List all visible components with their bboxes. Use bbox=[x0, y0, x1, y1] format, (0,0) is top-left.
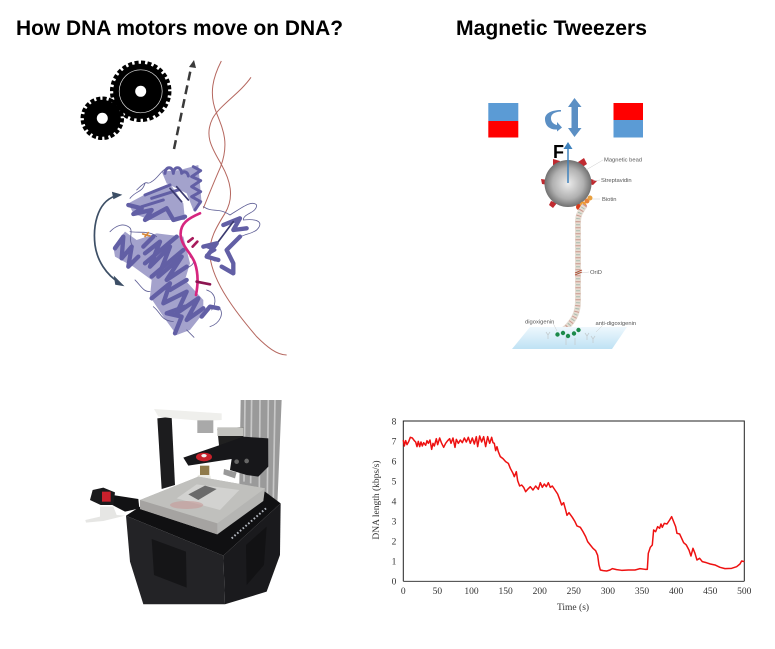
protein thin loops bbox=[110, 167, 260, 337]
white top arm bbox=[154, 409, 222, 421]
black magnet arm bbox=[183, 437, 268, 478]
black body top bbox=[126, 492, 281, 556]
x axis ticks: 200 bbox=[533, 587, 547, 597]
icon: large gear bbox=[112, 63, 169, 120]
x axis ticks: 50 bbox=[433, 587, 442, 597]
ATP site bbox=[143, 233, 150, 237]
protein dark sheet strands bbox=[170, 187, 233, 242]
streptavidin markers bbox=[541, 158, 597, 208]
digoxigenin markers bbox=[555, 328, 581, 338]
y axis ticks: 2 bbox=[392, 538, 397, 548]
arrow: dashed direction of motion bbox=[174, 60, 196, 149]
panel: DNA length vs time chart bbox=[371, 418, 752, 613]
y axis ticks: 1 bbox=[392, 558, 397, 568]
arrow: force bbox=[564, 142, 572, 183]
title: How DNA motors move on DNA?: How DNA motors move on DNA? bbox=[16, 17, 343, 40]
DNA strands bbox=[203, 61, 287, 355]
schematic labels: Biotin bbox=[602, 197, 617, 203]
left magnet bbox=[488, 103, 518, 138]
y axis ticks: 8 bbox=[392, 418, 397, 428]
panel: DNA motor illustration bbox=[83, 60, 287, 355]
protein main ribbons bbox=[115, 205, 247, 333]
icon: small gear bbox=[83, 99, 122, 138]
y axis ticks: 7 bbox=[392, 438, 397, 448]
arrow: vertical magnet translation bbox=[568, 98, 582, 137]
black body front bbox=[126, 516, 225, 604]
schematic labels: digoxigenin bbox=[525, 320, 554, 326]
schematic labels bbox=[525, 158, 642, 332]
protein body mass bbox=[113, 165, 203, 335]
camera tube bbox=[197, 420, 213, 433]
right magnet bbox=[614, 103, 643, 138]
magnetic bead bbox=[544, 160, 592, 207]
y axis ticks: 5 bbox=[392, 478, 397, 488]
x axis ticks: 150 bbox=[498, 587, 513, 597]
anti-digoxigenin antibodies bbox=[546, 332, 595, 345]
arrow: magnet rotation bbox=[545, 110, 562, 132]
schematic labels: anti-digoxigenin bbox=[596, 321, 636, 327]
black support post bbox=[157, 417, 175, 489]
data trace bbox=[403, 436, 744, 571]
schematic labels: Streptavidin bbox=[601, 178, 632, 184]
y axis ticks: 4 bbox=[392, 498, 397, 508]
y axis title: DNA length (kbps/s) bbox=[371, 460, 382, 540]
access panels bbox=[152, 539, 187, 588]
force label F: F bbox=[553, 142, 564, 162]
x axis ticks: 100 bbox=[464, 587, 479, 597]
y axis ticks: 3 bbox=[392, 518, 397, 528]
x axis ticks: 250 bbox=[567, 587, 581, 597]
y axis ticks: 6 bbox=[392, 458, 397, 468]
glass slide bbox=[512, 327, 627, 349]
panel: magnetic tweezers instrument photo bbox=[85, 400, 282, 604]
schematic labels: OriD bbox=[590, 270, 602, 276]
motor bbox=[217, 427, 243, 448]
objective holder bbox=[197, 466, 211, 484]
x axis ticks: 400 bbox=[669, 587, 683, 597]
arrow: curved domain motion bbox=[94, 193, 122, 285]
x axis bbox=[403, 580, 744, 582]
x axis title: Time (s) bbox=[557, 602, 589, 613]
protein ribbon structure bbox=[110, 165, 260, 337]
x axis ticks bbox=[401, 587, 752, 597]
x axis ticks: 450 bbox=[703, 587, 718, 597]
title: Magnetic Tweezers: Magnetic Tweezers bbox=[456, 17, 647, 40]
y axis ticks bbox=[392, 418, 397, 588]
rear aluminium column bbox=[239, 400, 282, 505]
DNA tether bbox=[559, 205, 585, 333]
schematic labels: Magnetic bead bbox=[604, 158, 642, 164]
control buttons bbox=[232, 508, 266, 538]
nucleic acid strand, magenta bbox=[181, 213, 210, 295]
side arm bbox=[85, 488, 139, 523]
aluminium stage bbox=[140, 477, 265, 534]
x axis ticks: 350 bbox=[635, 587, 649, 597]
black body right side bbox=[223, 503, 281, 604]
y axis ticks: 0 bbox=[392, 578, 397, 588]
plot frame bbox=[403, 421, 744, 581]
x axis ticks: 500 bbox=[737, 587, 752, 597]
panel: magnetic tweezers schematic bbox=[488, 98, 643, 349]
x axis ticks: 0 bbox=[401, 587, 406, 597]
x axis ticks: 300 bbox=[601, 587, 615, 597]
biotin cluster bbox=[576, 196, 592, 210]
